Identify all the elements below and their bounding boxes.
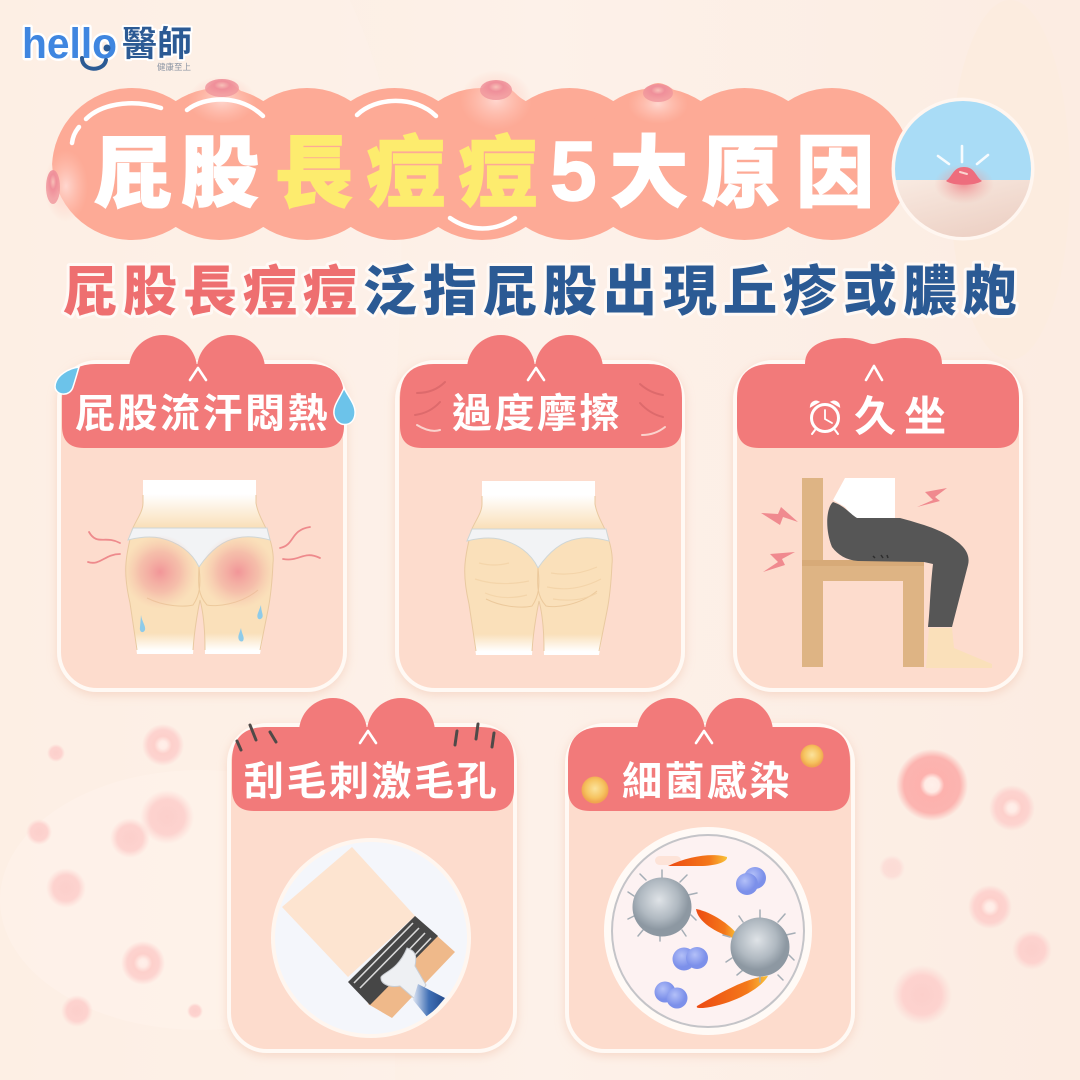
icon: hairs [237, 724, 494, 750]
panel: excessive friction [397, 335, 683, 690]
subtitle: 屁股長痘痘 [63, 262, 357, 322]
heading: prolonged sitting: 久坐 [854, 393, 946, 440]
illustration: razor on skin [271, 838, 471, 1038]
illustration: petri dish with bacteria [604, 827, 812, 1035]
title banner [44, 70, 912, 248]
icon: sweat drops [55, 367, 355, 424]
logo: 醫師 [122, 25, 192, 64]
icon: heat waves [88, 527, 320, 563]
panel: bacterial infection [567, 698, 853, 1051]
heading: excessive friction: 過度摩擦 [452, 392, 620, 436]
logo: hello [22, 20, 117, 68]
illustration: person on chair [802, 478, 992, 668]
heading: bacterial infection: 細菌感染 [622, 760, 790, 804]
icon: golden bacteria [582, 744, 824, 804]
illustration: hot buttocks [126, 480, 273, 654]
heading: shaving irritates follicles: 刮毛刺激毛孔 [244, 760, 496, 804]
heading: sweaty and hot: 屁股流汗悶熱 [75, 392, 328, 436]
illustration: wrinkled buttocks [465, 481, 612, 655]
title text [94, 124, 874, 218]
icon: pimple on skin [890, 98, 1036, 242]
top-edge pimples [188, 81, 692, 104]
icon: friction marks [415, 382, 665, 435]
panel: prolonged sitting [735, 338, 1021, 690]
background pimples [26, 724, 1052, 1027]
title text: 長痘痘 [275, 129, 537, 217]
logo: 健康至上 [157, 62, 192, 72]
icon: alarm clock [811, 402, 839, 434]
subtitle [63, 262, 1017, 322]
title text: 大原因 [610, 129, 874, 217]
title text: 5 [550, 124, 597, 218]
logo [22, 20, 192, 72]
subtitle: 泛指屁股出現丘疹或膿皰 [363, 262, 1017, 322]
panel: sweaty and hot [55, 335, 355, 690]
panel: shaving irritates follicles [229, 698, 515, 1051]
title text: 屁股 [94, 129, 259, 217]
icon: pain bolts [761, 488, 947, 572]
